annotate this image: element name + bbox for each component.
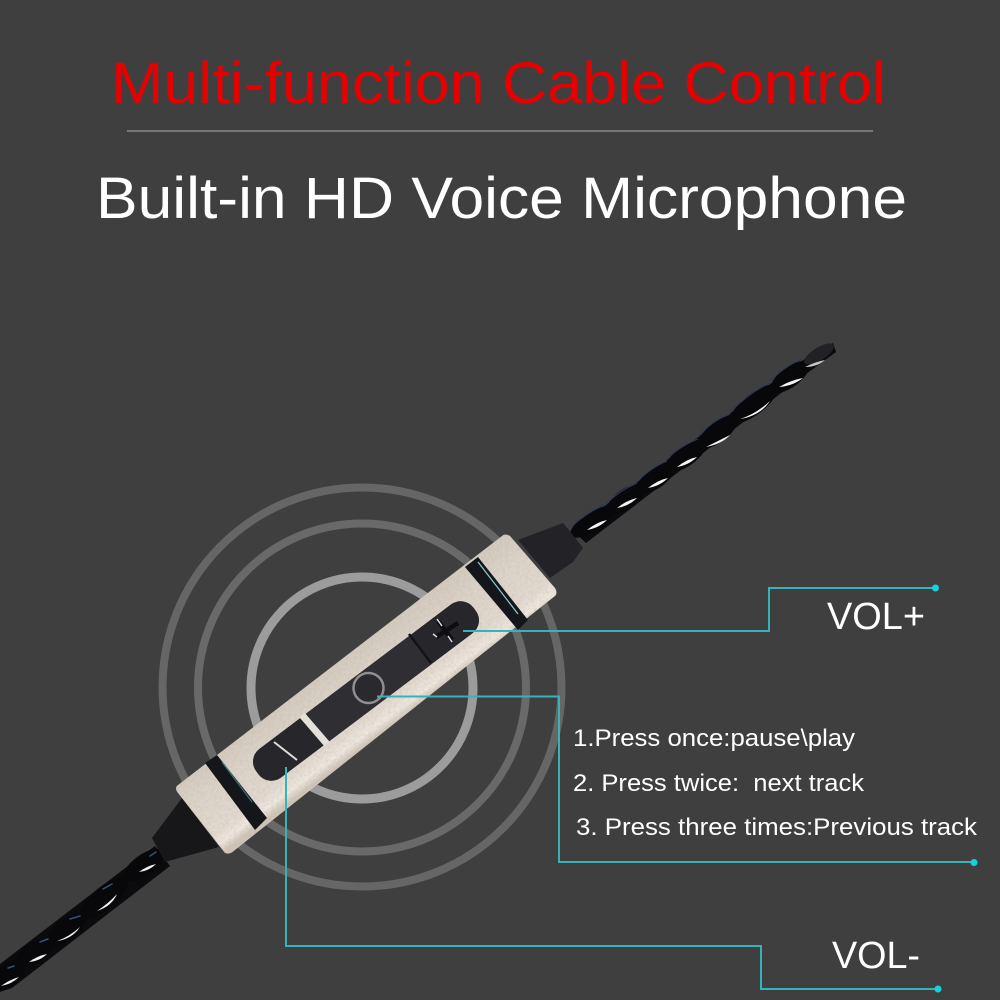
inline control body xyxy=(176,534,556,854)
icon: minus xyxy=(274,742,297,760)
leader line: multifunction button xyxy=(377,696,978,866)
button panel xyxy=(247,595,485,787)
leader line: VOL+ xyxy=(463,584,939,631)
upper dark band xyxy=(465,557,528,630)
button instructions xyxy=(573,725,978,841)
button divider white xyxy=(302,715,327,744)
button divider upper xyxy=(409,634,431,663)
concentric sound rings xyxy=(162,488,562,886)
icon: multifunction circle xyxy=(354,673,384,703)
subtitle: Built-in HD Voice Microphone xyxy=(96,166,907,231)
lower dark band xyxy=(205,755,267,830)
leader line: VOL- xyxy=(286,767,942,992)
metal housing xyxy=(176,534,556,854)
lower braided cable xyxy=(0,843,170,996)
button instructions: 3. Press three times:Previous track xyxy=(576,814,978,841)
button instructions: 1.Press once:pause\play xyxy=(573,725,855,752)
middle button shading xyxy=(303,635,432,744)
label: VOL+: VOL+ xyxy=(827,596,925,638)
upper strain relief xyxy=(518,523,583,578)
lower strain relief xyxy=(152,798,219,862)
upper braided cable xyxy=(566,339,837,544)
icon: plus xyxy=(433,619,458,642)
title: Multi-function Cable Control xyxy=(111,51,886,116)
button instructions: 2. Press twice: next track xyxy=(573,770,865,797)
label: VOL-: VOL- xyxy=(832,935,920,977)
